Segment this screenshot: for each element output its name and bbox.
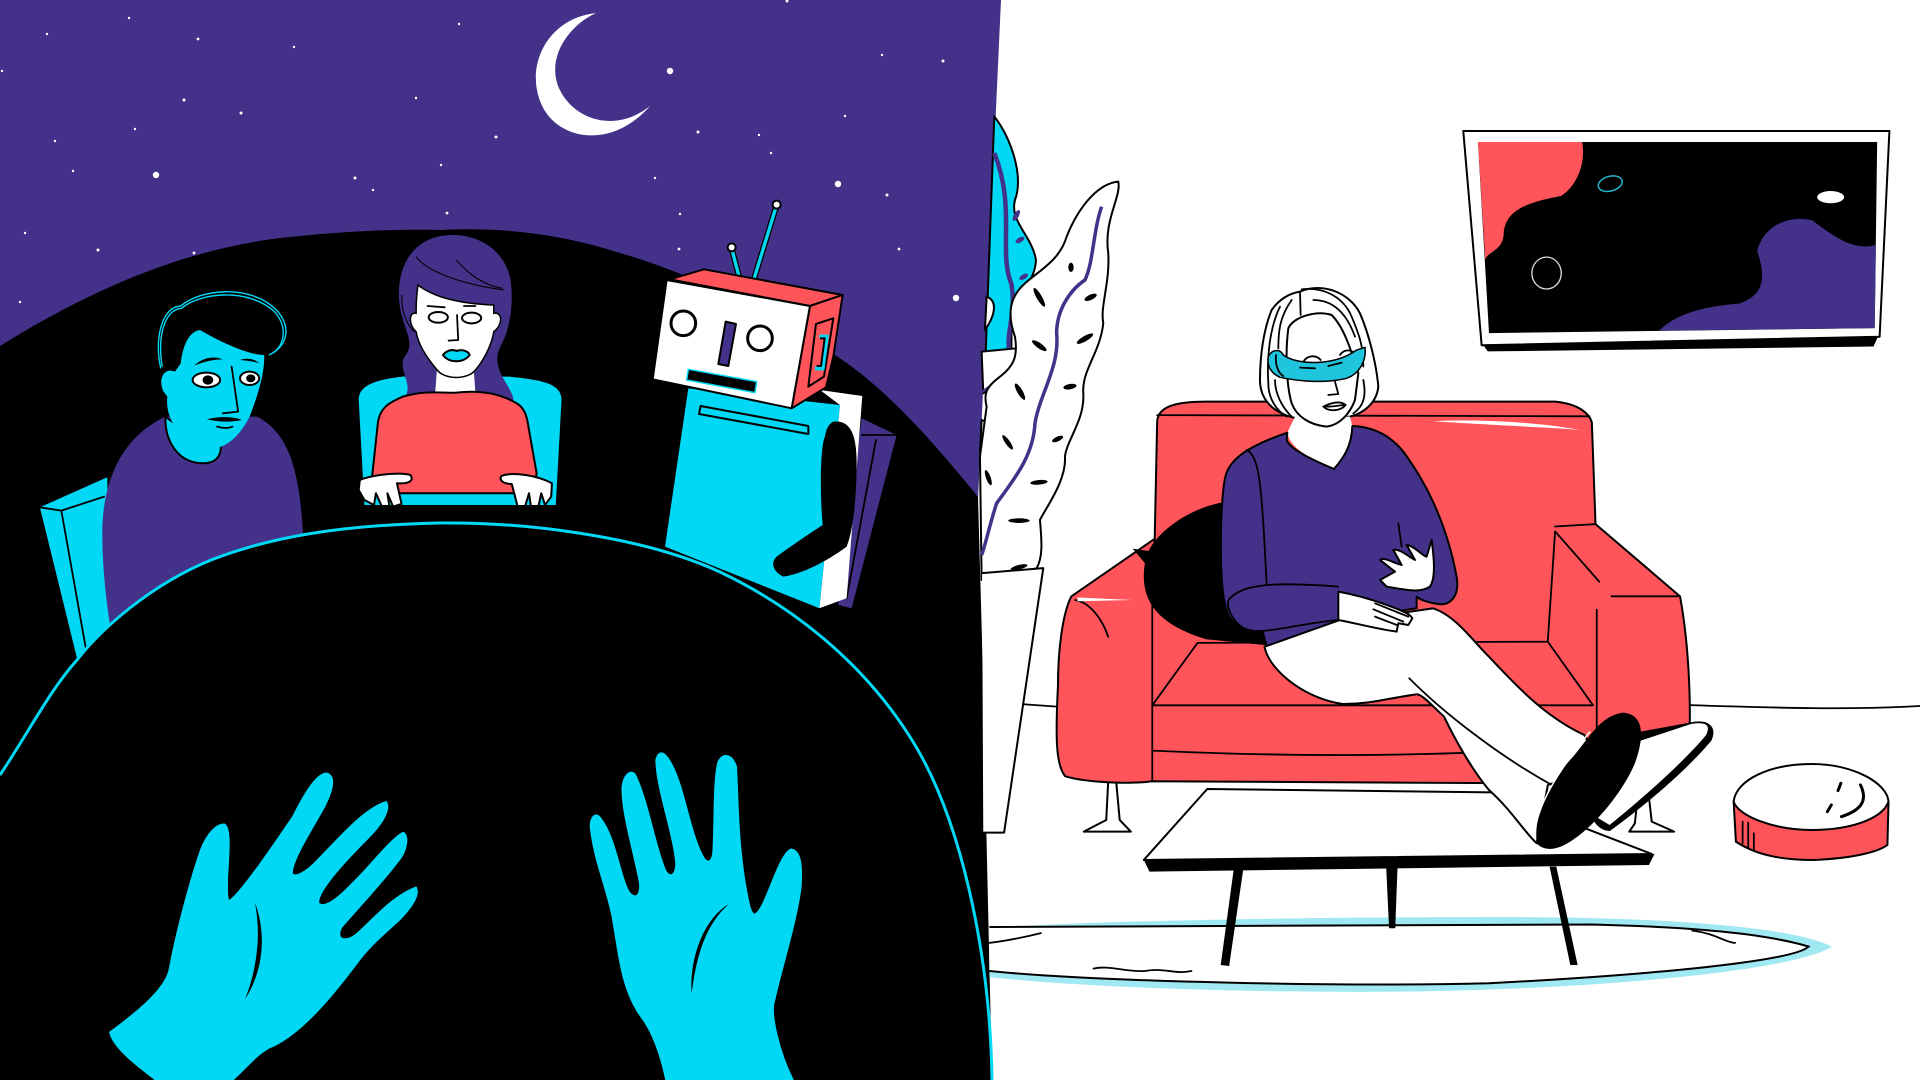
hair strands	[402, 257, 504, 332]
plant: cyan leaf	[986, 116, 1036, 351]
woman's right hand	[501, 474, 552, 506]
foreground figure: dark head silhouette	[0, 523, 992, 1080]
cyan leaf spots	[1011, 209, 1029, 281]
shoe	[1536, 713, 1641, 849]
sofa highlights	[1078, 420, 1586, 601]
chair: woman	[359, 377, 562, 505]
icon: crescent moon	[536, 13, 650, 135]
robot body	[665, 388, 840, 608]
woman's neck	[435, 367, 475, 393]
leaf spots	[983, 263, 1098, 572]
woman's left hand	[359, 474, 412, 507]
chair: man	[40, 477, 110, 660]
visor headset	[1268, 347, 1365, 381]
right palm line	[691, 904, 729, 993]
robot head	[653, 269, 843, 408]
hand on belly	[1380, 540, 1434, 590]
wall painting	[1463, 131, 1889, 351]
man's face details	[193, 357, 259, 428]
leaf vein	[982, 207, 1102, 555]
closed eyes	[1304, 350, 1353, 361]
robot vacuum	[1734, 764, 1889, 860]
panel: living room	[980, 116, 1920, 992]
red armchair	[1057, 402, 1690, 784]
plant: white leaf	[980, 182, 1119, 580]
stars	[1, 0, 959, 303]
robot white side	[819, 390, 862, 608]
neck	[1287, 417, 1352, 469]
figure: woman on chair	[359, 235, 562, 507]
hair strands	[1268, 289, 1365, 417]
robot backpack	[838, 418, 897, 608]
man's neck	[165, 417, 221, 463]
rug	[989, 917, 1832, 992]
robot arm	[773, 422, 857, 577]
back leaves behind plant	[980, 297, 1017, 452]
robot antennae	[728, 201, 781, 287]
woman's face	[410, 285, 501, 377]
man's sweater	[102, 417, 303, 625]
panel: night sky	[0, 0, 1001, 500]
vacuum smile	[1827, 783, 1864, 817]
legs	[1264, 608, 1712, 849]
robot chest slot	[699, 406, 808, 434]
floor line	[1020, 704, 1920, 708]
hand on lap	[1338, 592, 1412, 632]
woman's red top	[372, 392, 537, 493]
left palm line	[245, 903, 262, 999]
coffee table	[1144, 789, 1655, 966]
sofa legs	[1084, 777, 1674, 832]
face	[1287, 313, 1358, 427]
left hand	[111, 774, 416, 1080]
right hand	[591, 754, 801, 1080]
man's head	[161, 330, 264, 449]
black pillow	[1133, 502, 1273, 645]
panel: black hill	[0, 229, 992, 1080]
man's hair outline	[158, 292, 286, 368]
woman's hair	[399, 235, 514, 402]
figure: robot	[653, 201, 897, 608]
figure: man on chair	[40, 292, 303, 660]
sweater	[1221, 426, 1457, 646]
nose and lips	[1323, 382, 1346, 410]
woman's facial features	[428, 306, 481, 361]
plant pot	[982, 568, 1043, 833]
seated woman	[1221, 288, 1712, 849]
hair	[1260, 288, 1378, 418]
